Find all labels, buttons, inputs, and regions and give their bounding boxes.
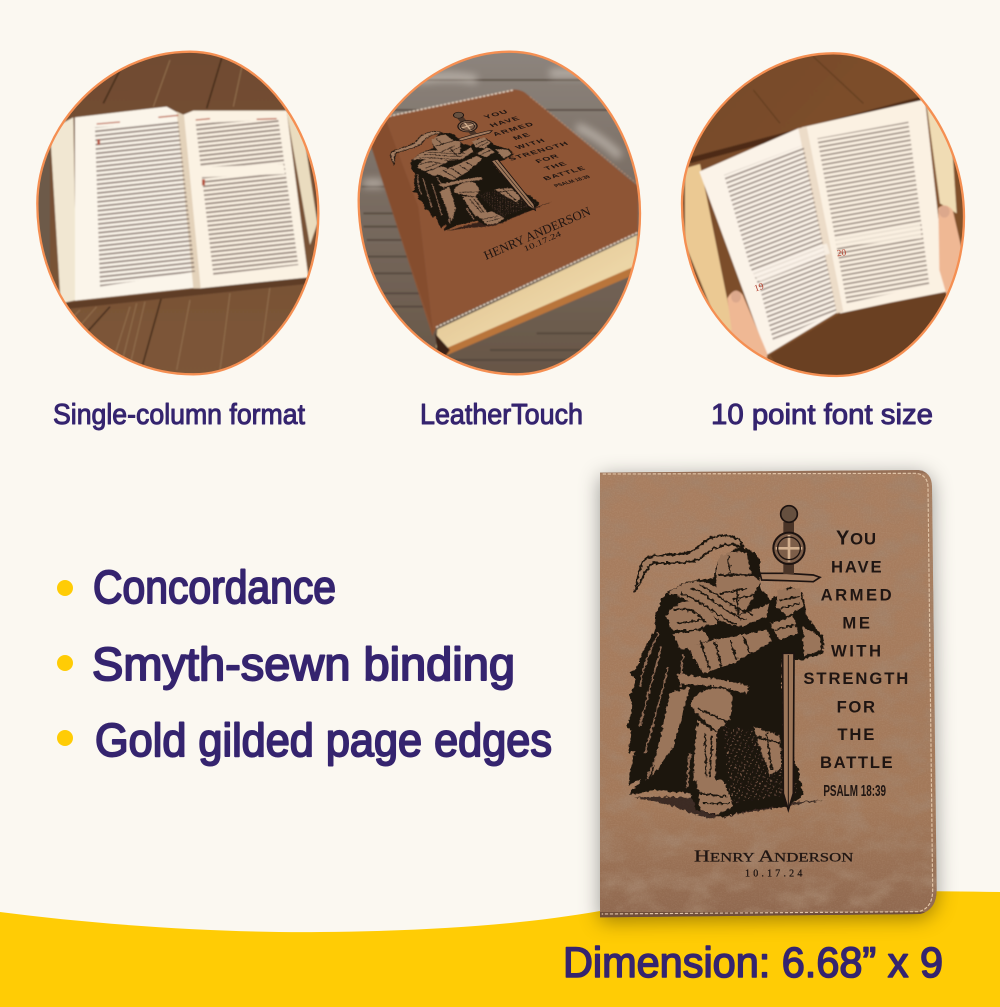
left hand: [726, 291, 768, 358]
engraved date on cover: 10.17.24: [522, 229, 562, 253]
engraved verse on cover: BATTLE: [541, 165, 588, 182]
engraved verse on cover: [483, 110, 590, 188]
engraved verse: WITH: [831, 642, 881, 661]
engraved verse on cover: THE: [542, 161, 569, 171]
chapter number 19: 19: [753, 282, 766, 294]
engraved name: HENRY ANDERSON: [694, 847, 853, 866]
engraved verse on cover: STRENGTH: [507, 141, 570, 162]
feature: binding: Smyth-sewn binding: [92, 638, 515, 690]
engraved knight on cover: [389, 112, 552, 232]
engraved verse: PSALM 18:39: [823, 783, 886, 800]
caption: LeatherTouch: LeatherTouch: [420, 399, 583, 431]
engraved verse: FOR: [837, 697, 875, 716]
engraved verse: STRENGTH: [803, 669, 908, 688]
engraved verse: [803, 527, 908, 800]
engraved verse: BATTLE: [820, 753, 893, 772]
bullet: page edges: [57, 730, 73, 746]
bullet: concordance: [57, 580, 73, 596]
engraved verse: THE: [837, 725, 874, 744]
engraved verse: YOU: [836, 527, 876, 549]
engraved date: 10.17.24: [745, 869, 802, 880]
leather Bible front cover: [597, 467, 940, 920]
feature list: [57, 561, 552, 766]
engraved verse: HAVE: [831, 558, 882, 577]
engraved verse on cover: ME: [511, 132, 532, 141]
engraved verse on cover: ARMED: [491, 121, 535, 137]
engraved knight with sword: [627, 506, 823, 818]
caption: single-column format: Single-column format: [53, 399, 305, 431]
caption: 10 point font size: 10 point font size: [711, 399, 933, 431]
engraved verse on cover: YOU: [482, 109, 510, 120]
bullet: binding: [57, 655, 73, 671]
right hand: [938, 205, 961, 295]
stitching: [602, 473, 933, 914]
engraved verse on cover: PSALM 18:39: [553, 175, 592, 188]
chapter number 20: 20: [836, 248, 847, 259]
photo: leather Bible on wood planks: [358, 50, 642, 376]
engraved verse on cover: HAVE: [488, 115, 522, 128]
engraved verse on cover: FOR: [534, 153, 560, 164]
engraved name on cover: HENRY ANDERSON: [482, 204, 593, 263]
engraved verse: ARMED: [821, 586, 892, 605]
engraved verse on cover: WITH: [514, 138, 547, 150]
dimension label: Dimension: 6.68” x 9: [563, 939, 943, 987]
engraved verse: ME: [842, 613, 870, 632]
photo: hands holding open Bible: [680, 52, 966, 378]
photo: open Bible on wood table: [36, 50, 320, 376]
feature: page edges: Gold gilded page edges: [95, 714, 552, 766]
feature: concordance: Concordance: [93, 561, 336, 613]
yellow wave footer: [0, 891, 1000, 1007]
